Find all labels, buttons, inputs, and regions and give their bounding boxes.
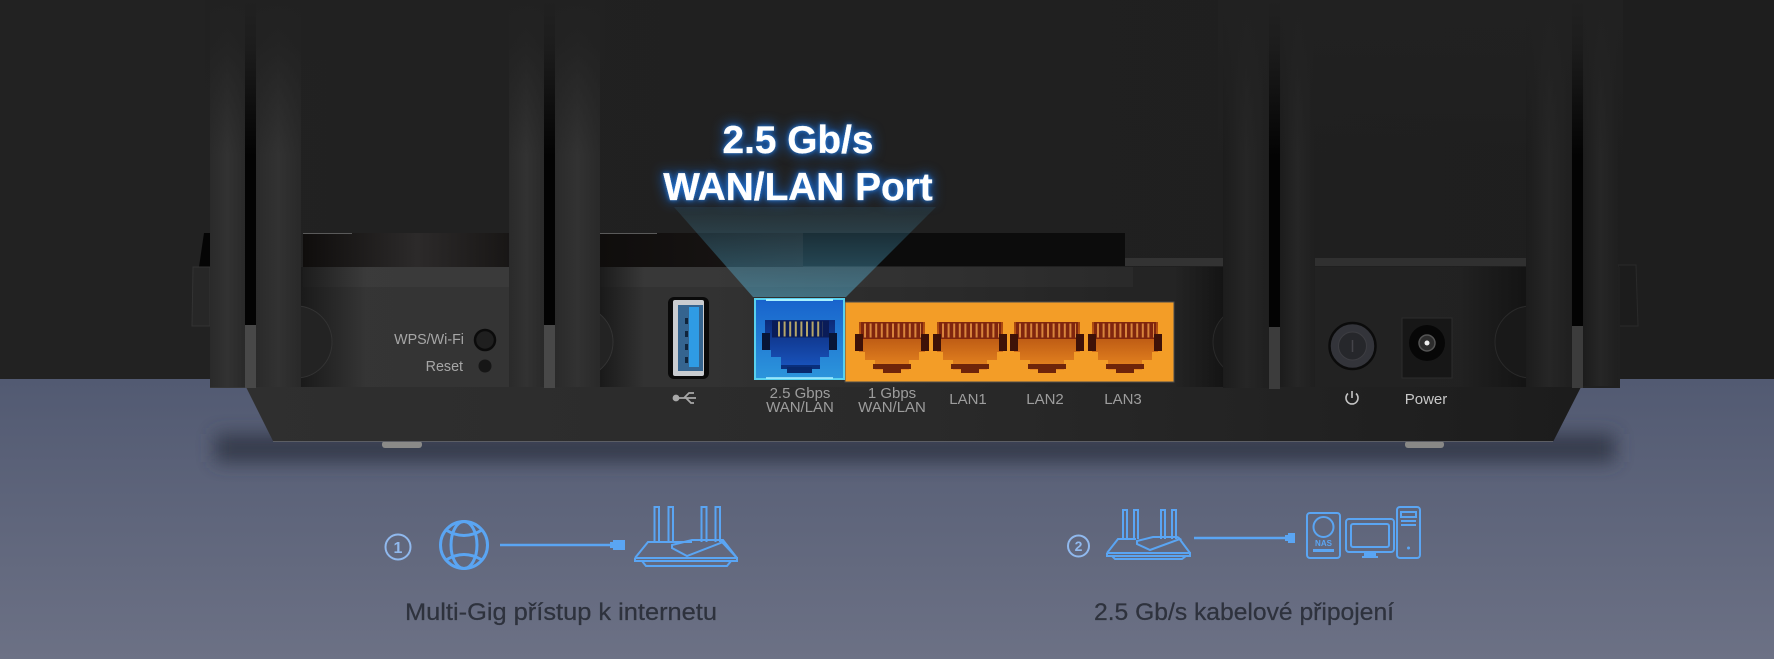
icon: PC tower xyxy=(1397,507,1420,558)
antenna hinges xyxy=(260,306,1567,378)
blue 2.5G port xyxy=(754,298,845,380)
antenna top fade xyxy=(205,0,1623,155)
antenna group 2 xyxy=(509,0,600,388)
step 1 diagram xyxy=(386,507,737,568)
number 1 xyxy=(386,534,410,560)
light beam xyxy=(674,207,936,297)
icon: router xyxy=(1107,510,1190,559)
orange port panel xyxy=(845,302,1174,382)
power socket xyxy=(1402,318,1452,378)
port labels: LAN1 xyxy=(949,391,987,408)
number 2 xyxy=(1068,536,1089,556)
USB port xyxy=(668,297,709,379)
floor background xyxy=(0,379,1774,659)
step 2 diagram xyxy=(1068,507,1420,559)
router side tabs xyxy=(192,233,1638,326)
icon: NAS: NAS xyxy=(1315,539,1333,548)
title xyxy=(663,119,933,209)
dark wall background xyxy=(0,0,1774,379)
port labels: LAN3 xyxy=(1104,391,1142,408)
port labels: 1 Gbps xyxy=(868,385,916,402)
USB symbol xyxy=(674,393,696,403)
icon: globe xyxy=(440,522,488,568)
antenna group 1 xyxy=(210,0,301,388)
icon: NAS xyxy=(1307,513,1340,558)
antenna group 3 xyxy=(1223,0,1315,389)
port labels: WAN/LAN xyxy=(766,399,834,416)
port labels: 2.5 Gbps xyxy=(770,385,830,402)
power icon xyxy=(1346,391,1358,404)
antenna group 4 xyxy=(1526,0,1618,388)
port labels xyxy=(766,385,1142,416)
router rear panel xyxy=(210,233,1620,442)
WPS and reset controls: Reset xyxy=(426,359,463,375)
arrow: cable xyxy=(500,540,625,550)
WPS and reset controls: WPS/Wi-Fi xyxy=(394,332,464,348)
step 2 caption: 2.5 Gb/s kabelové připojení xyxy=(1094,599,1394,626)
antenna shadows on panel xyxy=(301,267,1526,387)
icon: router xyxy=(635,507,737,566)
title: 2.5 Gb/s xyxy=(723,119,873,162)
port labels: WAN/LAN xyxy=(858,399,926,416)
title: WAN/LAN Port xyxy=(663,166,933,209)
port labels: LAN2 xyxy=(1026,391,1064,408)
arrow: cable xyxy=(1194,533,1295,543)
icon: monitor xyxy=(1346,519,1394,557)
number 1: 1 xyxy=(394,540,403,557)
step 1 caption: Multi-Gig přístup k internetu xyxy=(405,599,717,626)
power button xyxy=(1330,323,1376,369)
power label: Power xyxy=(1405,391,1447,408)
router feet xyxy=(382,441,1444,448)
WPS and reset controls xyxy=(394,330,495,375)
router shadow xyxy=(215,434,1615,462)
number 2: 2 xyxy=(1075,538,1083,554)
